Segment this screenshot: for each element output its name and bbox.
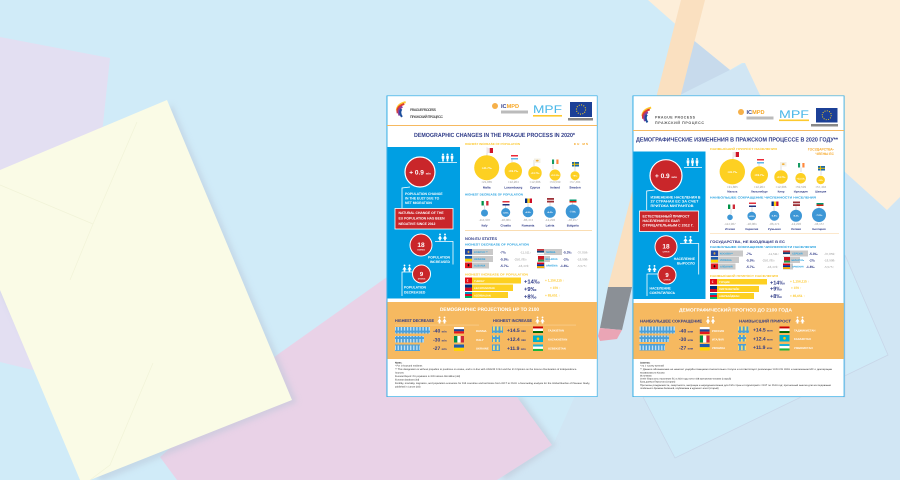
- heading: highest increase EU: НАИВЫСШИЙ ПРИРОСТ НАСЕЛЕНИЯ: [710, 147, 777, 151]
- table: non-EU decrease: -5.3‰: [563, 250, 572, 254]
- highest increase column: КАЗАХСТАН: [794, 337, 811, 341]
- stat: 9 countries: СТРАН: [664, 278, 671, 282]
- notes and sources: ** Данное обозначение не наносит ущерба позициям относительно статуса и соответствует резолюции 1244 СБ ООН и заключению МС о декларации: [640, 368, 833, 371]
- sheet frame: [387, 96, 598, 397]
- Malta: [720, 152, 745, 194]
- highest decrease column: HIGHEST DECREASE: [395, 318, 434, 323]
- notes and sources: Заметки:: [640, 362, 650, 364]
- text: population decreased: НАСЕЛЕНИЕ: [650, 286, 672, 290]
- background: pink paper shadow: [480, 395, 556, 480]
- text: population increased: POPULATION: [428, 256, 451, 260]
- Croatia: -4.5‰: [749, 215, 755, 218]
- heading: highest increase non-EU: НАИВЫСШИЙ ПРИРОСТ НАСЕЛЕНИЯ: [710, 274, 778, 278]
- table: non-EU decrease: UKRAINE: [474, 258, 486, 261]
- Italy: [479, 201, 491, 228]
- EU flag: [811, 108, 838, 126]
- highest increase column: +14.5 mln: [507, 328, 526, 334]
- EU flag: [568, 102, 593, 120]
- table: non-EU decrease: -1.8‰: [560, 264, 569, 268]
- ICMPD logo: ICMPD: [501, 104, 519, 110]
- highest decrease column: УКРАИНА: [712, 346, 725, 350]
- title: ДЕМОГРАФИЧЕСКИЕ ИЗМЕНЕНИЯ В ПРАЖСКОМ ПРОЦЕССЕ В 2020 ГОДУ**: [636, 136, 839, 144]
- table: non-EU decrease: -37,059↑: [824, 252, 836, 256]
- Latvia: Латвия: [791, 227, 801, 231]
- panel heading: ДЕМОГРАФИЧЕСКИЙ ПРОГНОЗ ДО 2100 ГОДА: [679, 306, 793, 312]
- highest increase column: +14.5 млн: [753, 328, 773, 334]
- table: non-EU decrease: БЕЛАРУСЬ: [792, 259, 805, 262]
- Cyprus: [774, 162, 788, 194]
- highest increase column: UZBEKISTAN: [548, 346, 566, 350]
- Prague Process logo: PRAGUE PROCESS: [410, 108, 437, 112]
- highest decrease column: [640, 316, 725, 352]
- notes and sources: Notes:: [395, 362, 402, 364]
- label: EU member states: ГОСУДАРСТВА-: [808, 148, 834, 152]
- table: non-EU decrease: ARMENIA: [546, 265, 558, 268]
- text: population change: NET MIGRATION: [405, 201, 432, 205]
- table: non-EU decrease: -1.8‰: [806, 265, 815, 269]
- Prague Process logo: ПРАЖСКИЙ ПРОЦЕСС: [655, 120, 704, 125]
- MPF logo: MPF: [779, 109, 809, 121]
- bar chart: non-EU increase: LIECHTENSTEIN: [474, 287, 495, 290]
- Latvia: -12,293: [545, 218, 555, 222]
- Ireland: +59,599: [550, 180, 561, 184]
- bar chart: non-EU increase: +14‰: [524, 278, 540, 286]
- panel: demographic projections: [387, 302, 597, 359]
- table: non-EU decrease: BELARUS: [546, 258, 558, 261]
- text: population change: ИЗМЕНЕНИЕ НАСЕЛЕНИЯ В: [650, 196, 701, 200]
- table: non-EU decrease: КОСОВО**: [720, 253, 733, 256]
- Italy: Italy: [481, 224, 488, 228]
- highest decrease column: ИТАЛИЯ: [712, 338, 724, 342]
- Croatia: Хорватия: [745, 227, 759, 231]
- Cyprus: Cyprus: [530, 186, 540, 190]
- callout: natural change: [395, 208, 453, 229]
- Croatia: -4.5‰: [503, 212, 509, 214]
- background: peach paper: [648, 0, 900, 210]
- chart: EU increase bubbles: [720, 152, 827, 194]
- highest decrease column: -30 млн: [679, 337, 693, 343]
- chart: EU decrease bubbles: [724, 202, 826, 231]
- bar chart: non-EU increase: ЛИХТЕНШТЕЙН: [719, 287, 739, 291]
- Prague Process logo: ПРАЖСКИЙ ПРОЦЕСС: [410, 114, 443, 119]
- text: population decreased: СОКРАТИЛОСЬ: [650, 291, 676, 295]
- stat: 18 countries: 18: [662, 244, 670, 250]
- Ireland: [550, 160, 561, 190]
- notes and sources: Источники:: [640, 374, 652, 378]
- icon: two people: [402, 264, 412, 272]
- bar chart: non-EU increase: + 85,651 ↑: [545, 294, 560, 298]
- table: non-EU decrease: SERBIA: [546, 251, 556, 254]
- bar chart: non-EU increase: +14‰: [770, 280, 785, 286]
- panel: demographic projections: [633, 303, 844, 359]
- header divider: [633, 130, 844, 131]
- icon: two people: [438, 234, 447, 240]
- blue side panel: [633, 152, 706, 299]
- text: population decreased: DECREASED: [404, 290, 426, 294]
- stat: 9 countries: [658, 266, 676, 284]
- heading: non-EU states: ГОСУДАРСТВА, НЕ ВХОДЯЩИЕ В ЕС: [710, 240, 786, 244]
- highest decrease column: -40 млн: [679, 328, 693, 334]
- table: non-EU decrease: -5.7‰: [500, 264, 509, 268]
- Luxembourg: [504, 155, 523, 190]
- icon: three people: [442, 154, 453, 162]
- highest increase column: +12.4 млн: [753, 336, 773, 342]
- icon: two people: [647, 265, 657, 272]
- notes and sources: Отчёт Евростата: население ЕС в 2020 году почти 448 миллионов человек (старый): [640, 378, 731, 380]
- Italy: Италия: [725, 227, 735, 231]
- chart: EU increase bubbles: [474, 148, 581, 190]
- bar chart: non-EU increase: [465, 278, 565, 300]
- heading: highest decrease EU: НАИБОЛЬШЕЕ СОКРАЩЕНИЕ ЧИСЛЕННОСТИ НАСЕЛЕНИЯ: [710, 196, 816, 200]
- text: population change: POPULATION CHANGE: [405, 192, 443, 196]
- label: EU MS: EU MS: [574, 142, 588, 146]
- table: non-EU decrease: -5.9‰: [500, 258, 509, 262]
- Croatia: -18,081: [501, 218, 511, 222]
- Romania: Румыния: [768, 227, 781, 231]
- callout: natural change: ОТРИЦАТЕЛЬНЫМ С 2012 Г.: [642, 224, 694, 228]
- Luxembourg: +12,204: [508, 180, 519, 184]
- Sweden: [569, 162, 581, 190]
- divider: [710, 232, 839, 235]
- table: non-EU decrease: -7‰: [500, 250, 507, 254]
- highest increase column: НАИВЫСШИЙ ПРИРОСТ: [739, 318, 792, 324]
- Ireland: +59,599: [795, 185, 806, 189]
- stat: 9 countries: [412, 265, 430, 283]
- blue side panel: [387, 147, 460, 298]
- Malta: +21,885: [481, 180, 492, 184]
- background: shadowed paper corner: [680, 39, 730, 95]
- table: non-EU decrease: [710, 250, 836, 270]
- Romania: -4.5‰: [771, 215, 778, 218]
- callout: natural change: EU POPULATION HAS BEEN: [398, 216, 445, 220]
- Cyprus: +12,386: [530, 180, 541, 184]
- table: non-EU decrease: АЛБАНИЯ: [720, 266, 733, 269]
- Croatia: -18,081: [747, 222, 757, 226]
- notes and sources: Eurostat Report: EU population in 2020 almost 448 million (old): [395, 375, 460, 378]
- table: non-EU decrease: -16,472↑: [518, 264, 530, 268]
- text: population increased: НАСЕЛЕНИЕ: [674, 257, 696, 261]
- table: non-EU decrease: -2‰: [563, 258, 570, 262]
- text: population decreased: POPULATION: [404, 286, 427, 290]
- Sweden: [815, 166, 827, 194]
- subheading: highest decrease: НАИБОЛЬШЕЕ СОКРАЩЕНИЕ ЧИСЛЕННОСТИ НАСЕЛЕНИЯ: [710, 245, 816, 249]
- Bulgaria: -48,157: [814, 222, 824, 226]
- bar chart: non-EU increase: +8‰: [770, 294, 782, 300]
- stat: +0.9 mln: + 0.9 mln: [409, 170, 431, 176]
- table: non-EU decrease: СЕРБИЯ: [792, 253, 803, 256]
- stat: 18 countries: [410, 234, 432, 256]
- Cyprus: +12,386: [776, 185, 787, 189]
- chart: EU decrease bubbles: [479, 198, 580, 228]
- stat: +0.9 mln: [405, 157, 435, 187]
- bar chart: non-EU increase: + 370 ↑: [550, 286, 561, 290]
- stat: 9 countries: STATES: [418, 278, 426, 280]
- bar chart: non-EU increase: +9‰: [770, 286, 782, 292]
- Sweden: Sweden: [569, 186, 581, 190]
- highest decrease column: -27 mln: [433, 346, 447, 352]
- Croatia: [745, 202, 759, 231]
- table: non-EU decrease: -5.3‰: [809, 252, 818, 256]
- table: non-EU decrease: -250,785↑: [514, 258, 528, 262]
- highest increase column: TAJIKISTAN: [548, 328, 564, 332]
- stat: 9 countries: 9: [420, 271, 424, 278]
- Bulgaria: Bulgaria: [567, 224, 579, 228]
- callout: natural change: NEGATIVE SINCE 2012: [398, 222, 435, 226]
- Russian infographic sheet: [633, 96, 844, 397]
- background: pencil body: [608, 0, 705, 287]
- heading: highest increase EU: HIGHEST INCREASE OF POPULATION: [465, 142, 520, 146]
- bar chart: non-EU increase: AZERBAIJAN: [474, 294, 491, 297]
- stat: 18 countries: STATES: [417, 248, 425, 252]
- background: light blue paper lower right: [643, 255, 888, 458]
- Italy: -114,907: [479, 218, 491, 222]
- Cyprus: +13.7‰: [531, 172, 540, 175]
- Latvia: -6.4‰: [793, 215, 800, 218]
- background: lilac paper: [0, 37, 110, 370]
- Latvia: -12,293: [791, 222, 801, 226]
- text: population change: ПРИТОКА МИГРАНТОВ: [650, 204, 694, 208]
- highest increase column: +12.4 mln: [507, 337, 526, 343]
- callout: natural change: НАСЕЛЕНИЯ ЕС БЫЛ: [642, 219, 680, 223]
- bar chart: non-EU increase: + 1,156,115 ↑: [790, 280, 810, 284]
- Sweden: +57,404: [815, 185, 826, 189]
- Cyprus: +13.7‰: [777, 176, 786, 179]
- table: non-EU decrease: -5,575↑: [577, 264, 588, 268]
- header divider: [387, 125, 597, 126]
- background: muted blue sheet right: [497, 63, 900, 480]
- panel heading: DEMOGRAPHIC PROJECTIONS UP TO 2100: [440, 307, 539, 313]
- ICMPD logo: [492, 103, 528, 114]
- text: population change: IN THE EU27 DUE TO: [405, 196, 440, 200]
- Bulgaria: Болгария: [812, 227, 826, 231]
- bar chart: non-EU increase: + 85,651 ↑: [790, 294, 805, 298]
- Prague Process logo: PRAGUE PROCESS: [655, 116, 696, 120]
- Malta: +41.7‰: [727, 170, 737, 174]
- highest increase column: KAZAKHSTAN: [548, 338, 567, 342]
- background: yellow envelope: [0, 100, 292, 480]
- table: non-EU decrease: -18,998↑: [824, 258, 836, 262]
- table: non-EU decrease: ALBANIA: [474, 265, 485, 268]
- Sweden: +57,404: [570, 180, 581, 184]
- Ireland: Ирландия: [794, 190, 808, 194]
- stat: 18 countries: [655, 236, 677, 258]
- Romania: -86,474: [523, 218, 533, 222]
- Cyprus: [528, 158, 542, 190]
- table: non-EU decrease: -11,511↑: [768, 252, 780, 256]
- Latvia: [544, 198, 556, 228]
- Sweden: Швеция: [815, 190, 827, 194]
- background: envelope shadow: [0, 104, 297, 480]
- bar chart: non-EU increase: + 370 ↑: [791, 286, 802, 290]
- Luxembourg: Люксембург: [751, 190, 769, 194]
- callout: natural change: NATURAL CHANGE OF THE: [398, 211, 444, 215]
- Malta: Мальта: [727, 190, 738, 194]
- divider: [465, 229, 592, 232]
- highest decrease column: -27 млн: [679, 346, 693, 352]
- Italy: -114,907: [724, 222, 736, 226]
- Ireland: Ireland: [550, 186, 560, 190]
- notes and sources: published in Lancet (old): [395, 386, 421, 388]
- highest decrease column: ITALY: [476, 338, 484, 342]
- text: population increased: INCREASED: [430, 260, 451, 264]
- stat: 18 countries: 18: [417, 242, 425, 249]
- highest decrease column: RUSSIA: [476, 329, 487, 333]
- table: non-EU decrease: [465, 249, 589, 268]
- Malta: +41.7‰: [482, 166, 492, 170]
- highest increase column: УЗБЕКИСТАН: [794, 346, 813, 350]
- Romania: -4.5‰: [525, 211, 532, 214]
- highest increase column: +11.9 млн: [753, 345, 773, 351]
- stat: +0.9 mln: [650, 160, 682, 192]
- Ireland: [794, 163, 808, 194]
- Bulgaria: -7.0‰: [816, 214, 823, 217]
- highest decrease column: UKRAINE: [476, 346, 489, 350]
- notes and sources: * For 1 thousand residents: [395, 364, 423, 368]
- Latvia: Latvia: [546, 224, 555, 228]
- highest decrease column: НАИБОЛЬШЕЕ СОКРАЩЕНИЕ: [640, 318, 702, 324]
- background: pink paper: [160, 277, 552, 480]
- Malta: [474, 148, 499, 190]
- text: population change: 27 СТРАНАХ ЕС ЗА СЧЕТ: [650, 200, 700, 204]
- Luxembourg: +19.7‰: [508, 169, 518, 173]
- notes and sources: глобального бремени болезней, опубликован в журнале Lancet (старый): [640, 387, 719, 390]
- highest increase column: [738, 316, 815, 351]
- Malta: Malta: [483, 186, 491, 190]
- title: DEMOGRAPHIC CHANGES IN THE PRAGUE PROCESS IN 2020*: [414, 132, 576, 139]
- notes and sources: Eurostat database (old): [395, 378, 419, 382]
- icon: two people: [683, 236, 693, 243]
- ICMPD logo: ICMPD: [746, 110, 765, 116]
- heading: non-EU states: NON-EU STATES: [465, 237, 497, 241]
- highest increase column: ТАДЖИКИСТАН: [794, 328, 815, 332]
- Sweden: +5‰: [818, 179, 824, 182]
- Sweden: +5‰: [573, 175, 578, 178]
- notes and sources: независимости Косово: [640, 371, 665, 374]
- ICMPD logo: [738, 109, 774, 120]
- stat: 18 countries: СТРАН: [663, 250, 670, 254]
- heading: highest decrease EU: HIGHEST DECREASE OF POPULATION: [465, 192, 523, 196]
- notes and sources: * на 1 тысячу жителей: [640, 364, 665, 368]
- table: non-EU decrease: KOSOVO **: [474, 251, 488, 254]
- highest decrease column: -40 mln: [433, 328, 447, 334]
- bar chart: non-EU increase: ТУРЦИЯ: [719, 281, 730, 284]
- table: non-EU decrease: АРМЕНИЯ: [792, 266, 804, 269]
- background: pencil ferrule: [600, 287, 632, 330]
- table: non-EU decrease: -5.7‰: [746, 265, 755, 269]
- stat: +0.9 mln: + 0.9 млн: [655, 173, 677, 180]
- stat: 9 countries: 9: [665, 272, 669, 279]
- Romania: -86,474: [769, 222, 780, 226]
- Bulgaria: [566, 198, 580, 228]
- Ireland: +12.1‰: [551, 174, 560, 177]
- Cyprus: Кипр: [778, 190, 785, 194]
- Luxembourg: Luxembourg: [504, 186, 523, 190]
- table: non-EU decrease: -11,511↑: [520, 250, 532, 254]
- Luxembourg: [751, 159, 769, 194]
- Bulgaria: [812, 202, 826, 231]
- background: pencil eraser: [598, 328, 622, 341]
- notes and sources: Прогнозы рождаемости, смертности, миграции и народонаселения для 195 стран и территорий с 2017 по 2100 год: прогнозный анализ для исследования: [640, 384, 832, 387]
- connector lines: [647, 168, 702, 296]
- table: non-EU decrease: -7‰: [746, 252, 753, 256]
- Italy: [724, 204, 736, 231]
- notes and sources: ** This designation is without prejudice to positions on status, and is in line with UNSCR 1244 and the ICJ Opinion on the Kosovo Declaration of Independence.: [395, 368, 577, 371]
- bar chart: non-EU increase: [710, 279, 810, 300]
- bar chart: non-EU increase: АЗЕРБАЙДЖАН: [719, 294, 740, 298]
- highest increase column: [492, 316, 576, 352]
- bar chart: non-EU increase: TURKEY: [474, 280, 485, 283]
- Latvia: [790, 202, 802, 231]
- Croatia: Croatia: [501, 224, 511, 228]
- callout: natural change: [640, 211, 698, 232]
- table: non-EU decrease: УКРАИНА: [720, 259, 732, 262]
- label: EU member states: ЧЛЕНЫ ЕС: [816, 152, 835, 156]
- Luxembourg: +12,204: [754, 185, 765, 189]
- notes and sources: Fertility, mortality, migration, and population scenarios for 195 countries and territories from 2017 to 2100: a forecasting analysis for the Global Burden of Disease Study,: [395, 382, 590, 385]
- Malta: +21,885: [727, 185, 738, 189]
- Romania: [768, 202, 781, 231]
- Luxembourg: +19.7‰: [754, 173, 764, 177]
- connector lines: [402, 162, 457, 296]
- MPF logo: MPF: [533, 104, 562, 116]
- Ireland: +12.1‰: [796, 177, 806, 180]
- Latvia: -6.4‰: [547, 211, 554, 214]
- bar chart: non-EU increase: +9‰: [524, 286, 537, 293]
- Bulgaria: -48,157: [568, 218, 578, 222]
- bar chart: non-EU increase: +8‰: [524, 294, 537, 300]
- table: non-EU decrease: -16,472↑: [767, 265, 779, 269]
- highest decrease column: -30 mln: [433, 338, 447, 344]
- Prague Process logo: [642, 108, 704, 125]
- table: non-EU decrease: -2‰: [809, 258, 816, 262]
- table: non-EU decrease: -5.9‰: [746, 258, 755, 262]
- Romania: [522, 198, 535, 228]
- sheet frame: [633, 96, 844, 397]
- Prague Process logo: [397, 102, 443, 119]
- Croatia: [501, 201, 511, 228]
- table: non-EU decrease: -18,998↑: [577, 258, 589, 262]
- heading: highest increase non-EU: HIGHEST INCREASE OF POPULATION: [465, 272, 528, 276]
- notes and sources: База данных Евростата (старая): [640, 381, 675, 384]
- Romania: Romania: [522, 224, 535, 228]
- notes and sources: Sources:: [395, 372, 405, 374]
- table: non-EU decrease: -37,059↑: [577, 250, 589, 254]
- table: non-EU decrease: -5,575↑: [824, 265, 835, 269]
- bar chart: non-EU increase: + 1,156,115 ↑: [545, 278, 565, 282]
- subheading: highest decrease: HIGHEST DECREASE OF POPULATION: [465, 242, 529, 246]
- highest increase column: +11.9 mln: [507, 346, 526, 352]
- highest increase column: HIGHEST INCREASE: [493, 318, 532, 323]
- icon: three people: [687, 158, 698, 166]
- text: population increased: ВЫРОСЛО: [677, 262, 695, 266]
- highest decrease column: [395, 316, 489, 352]
- callout: natural change: ЕСТЕСТВЕННЫЙ ПРИРОСТ: [642, 214, 690, 218]
- highest decrease column: РОССИЯ: [712, 329, 724, 333]
- table: non-EU decrease: -250,785↑: [762, 258, 776, 262]
- English infographic sheet: [387, 96, 598, 397]
- Bulgaria: -7.0‰: [569, 210, 577, 214]
